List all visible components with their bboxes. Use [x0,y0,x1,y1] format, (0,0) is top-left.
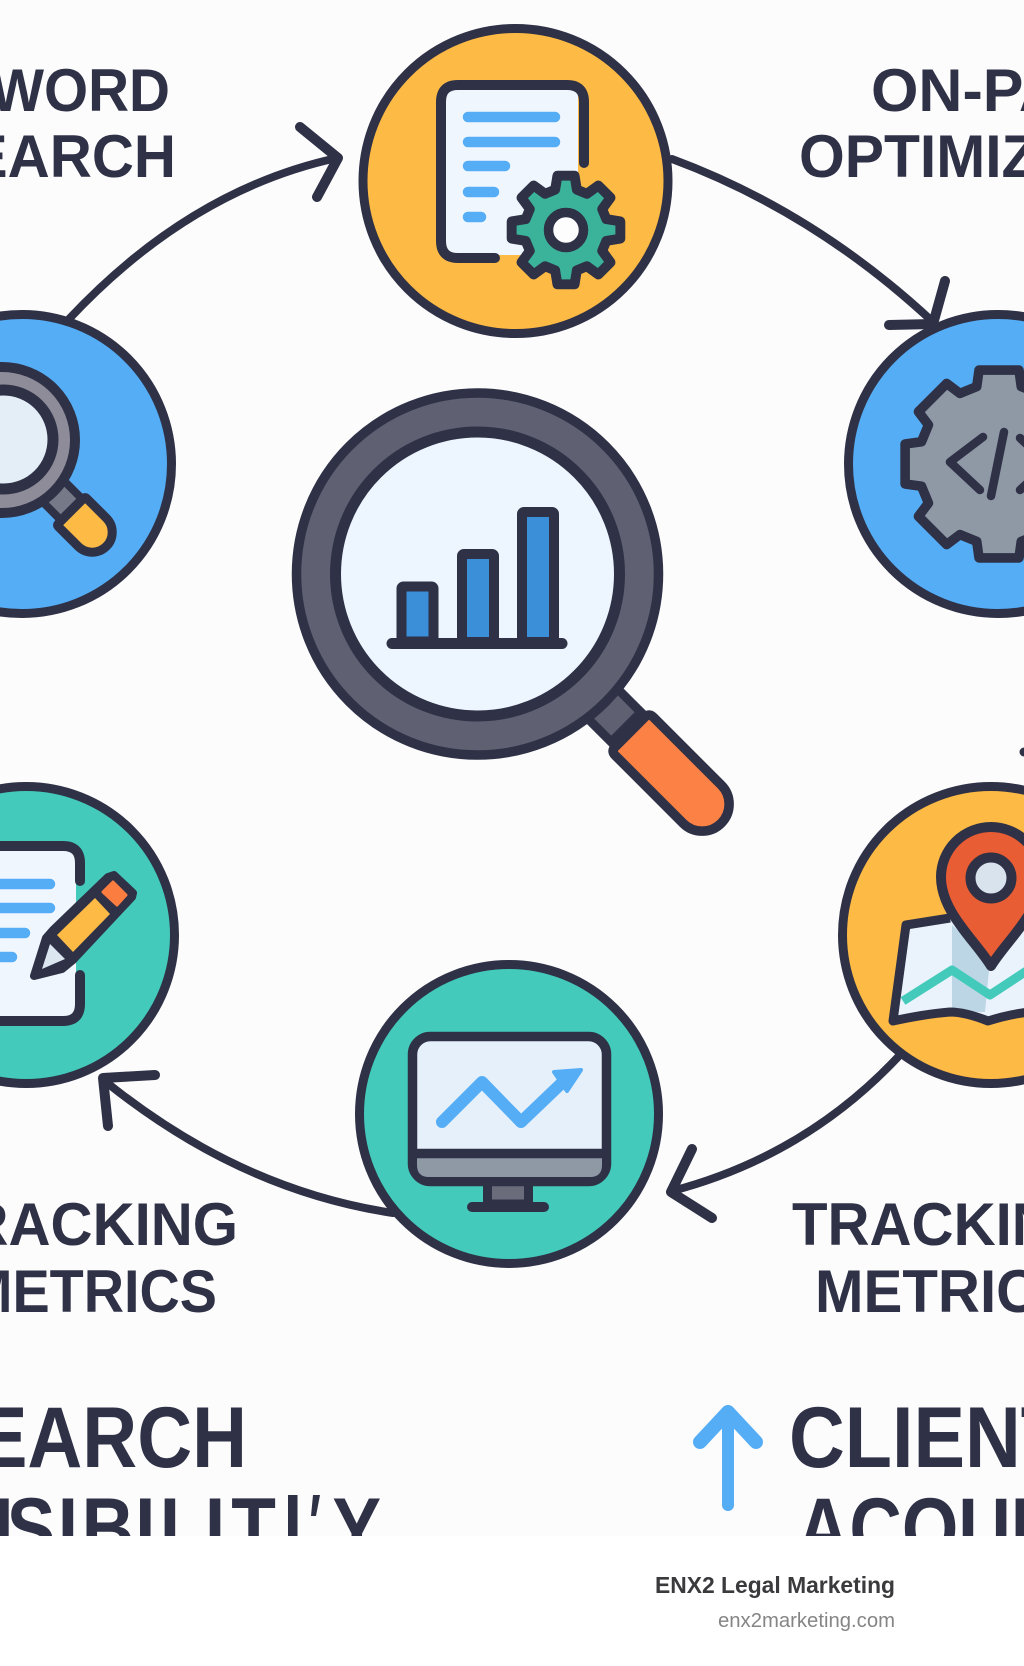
pencil [34,875,133,976]
footer band [0,1536,1024,1666]
label: keyword research [0,57,176,190]
arrow tip fragment at right edge [1020,748,1024,756]
magnifier neck [39,477,82,520]
icon: content and pencil circle [0,786,174,1084]
icon: code gear circle [848,314,1024,614]
gear [512,176,620,284]
bar chart [392,512,562,644]
icon: map pin circle [842,786,1024,1084]
magnifier handle [611,713,740,842]
icon: blue up arrow [700,1412,756,1505]
magnifier lens [336,432,620,716]
icon: document and gear circle [363,28,668,334]
footer text [655,1572,895,1632]
icon: monitor trend circle [360,964,658,1264]
arrow: monitor to content [103,1075,393,1213]
icon: central magnifier with bar chart [296,393,740,842]
document page [441,85,584,258]
grey gear [905,370,1024,558]
monitor stand [472,1180,544,1207]
arrow: on-page to technical [672,159,945,325]
magnifier ring [296,393,658,755]
folded map [893,918,1024,1021]
footer text: enx2marketing.com [718,1610,895,1632]
arrow: research to keyword [69,127,338,319]
location pin [941,827,1024,966]
arrow: local to monitor [671,1057,898,1218]
trend arrow [442,1070,581,1122]
heading: search visibility [0,1390,381,1576]
label: on-page optimization [799,57,1024,190]
magnifier neck [583,684,641,742]
label: tracking metrics left [0,1191,238,1325]
footer text: ENX2 Legal Marketing [655,1572,895,1598]
heading: client acquisition [789,1390,1024,1577]
icon: research magnifier circle [0,314,172,614]
magnifier lens [0,390,53,489]
magnifier handle [57,497,120,560]
code brackets glyph [950,432,1024,496]
label: tracking metrics right [792,1191,1024,1325]
magnifier ring [0,367,75,513]
monitor screen [412,1036,607,1182]
document page [0,846,80,1021]
